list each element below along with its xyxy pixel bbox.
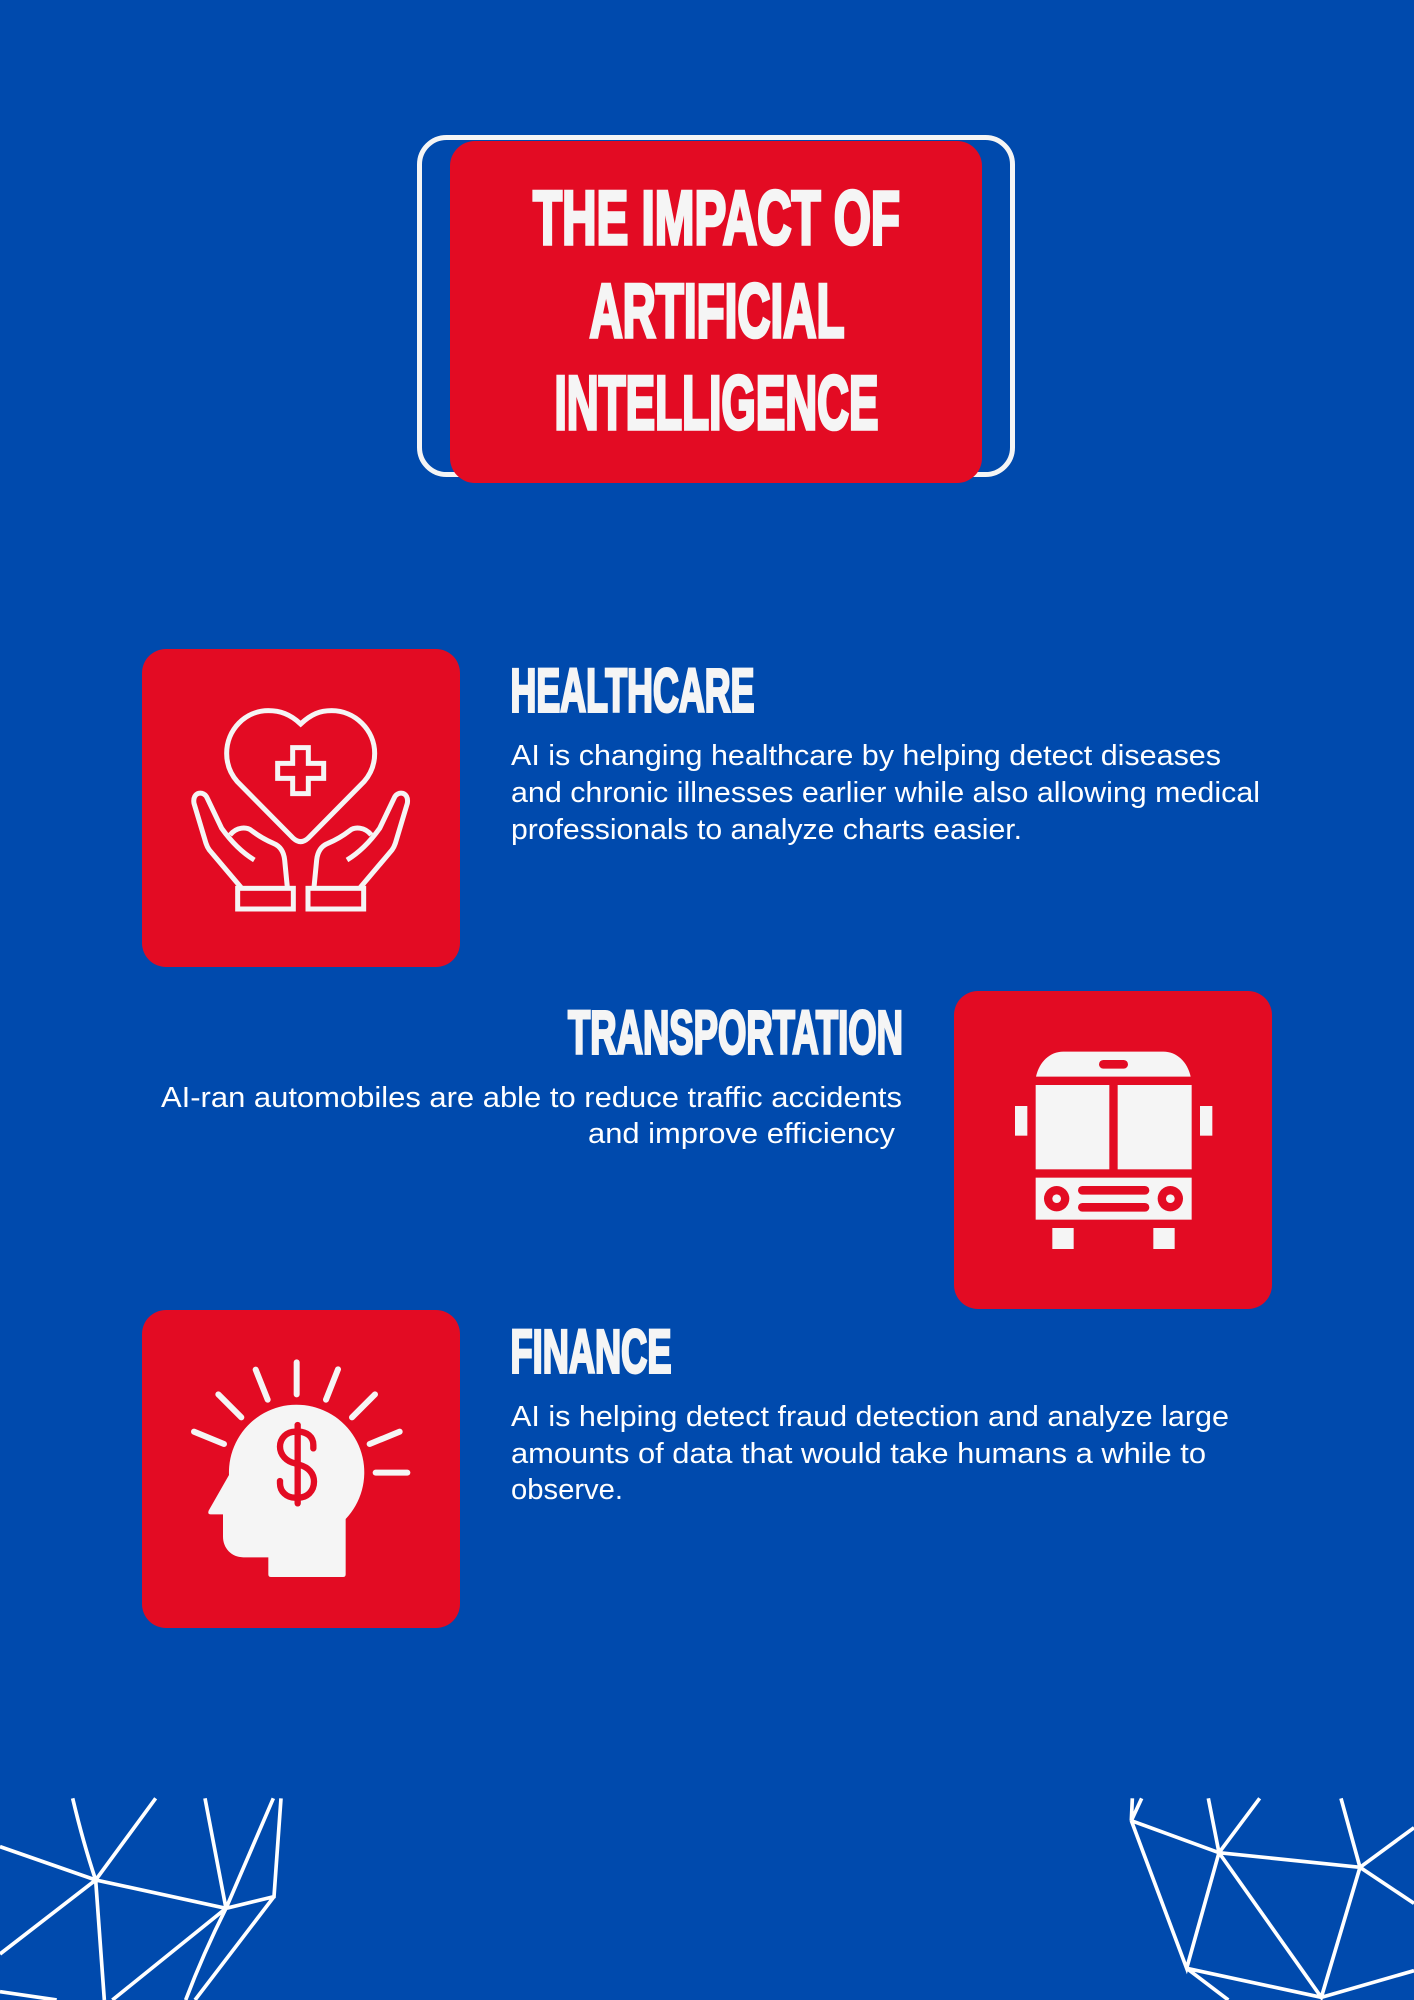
body: healthcare: and chronic illnesses earlier while also allowing medical [511,777,1260,809]
panel: healthcare text [510,656,1260,846]
title red panel [450,141,982,483]
heading: finance: FINANCE [510,1318,672,1386]
title outline frame [420,138,1012,474]
body: transportation: AI-ran automobiles are able to reduce traffic accidents [161,1082,902,1114]
body: finance: observe. [511,1474,623,1506]
title text: THE IMPACT OF [533,176,900,261]
body: transportation [161,1082,902,1150]
icon: head with dollar sign [194,1362,407,1577]
title text: ARTIFICIAL [590,269,844,354]
icon: heart in caring hands [194,711,408,909]
body: finance [511,1401,1229,1506]
panel: finance text [510,1318,1229,1506]
panel: finance icon [142,1310,460,1628]
title text [533,176,900,446]
panel: transportation text [161,998,903,1150]
body: healthcare: professionals to analyze charts easier. [511,814,1022,846]
heading: healthcare: HEALTHCARE [510,656,754,726]
body: finance: amounts of data that would take humans a while to [511,1438,1206,1470]
heading: transportation: TRANSPORTATION [568,998,903,1068]
body: finance: AI is helping detect fraud detection and analyze large [511,1401,1229,1433]
panel: healthcare icon [142,649,460,967]
body: healthcare: AI is changing healthcare by helping detect diseases [511,740,1221,772]
title text: INTELLIGENCE [554,361,878,446]
icon: bus [1015,1052,1212,1249]
decoration: bottom-left polygon mesh [0,1798,281,2000]
body: healthcare [511,740,1260,846]
decoration: bottom-right polygon mesh [1131,1798,1414,2000]
title block [420,138,1012,483]
body: transportation: and improve efficiency [588,1118,896,1150]
panel: transportation icon [954,991,1272,1309]
